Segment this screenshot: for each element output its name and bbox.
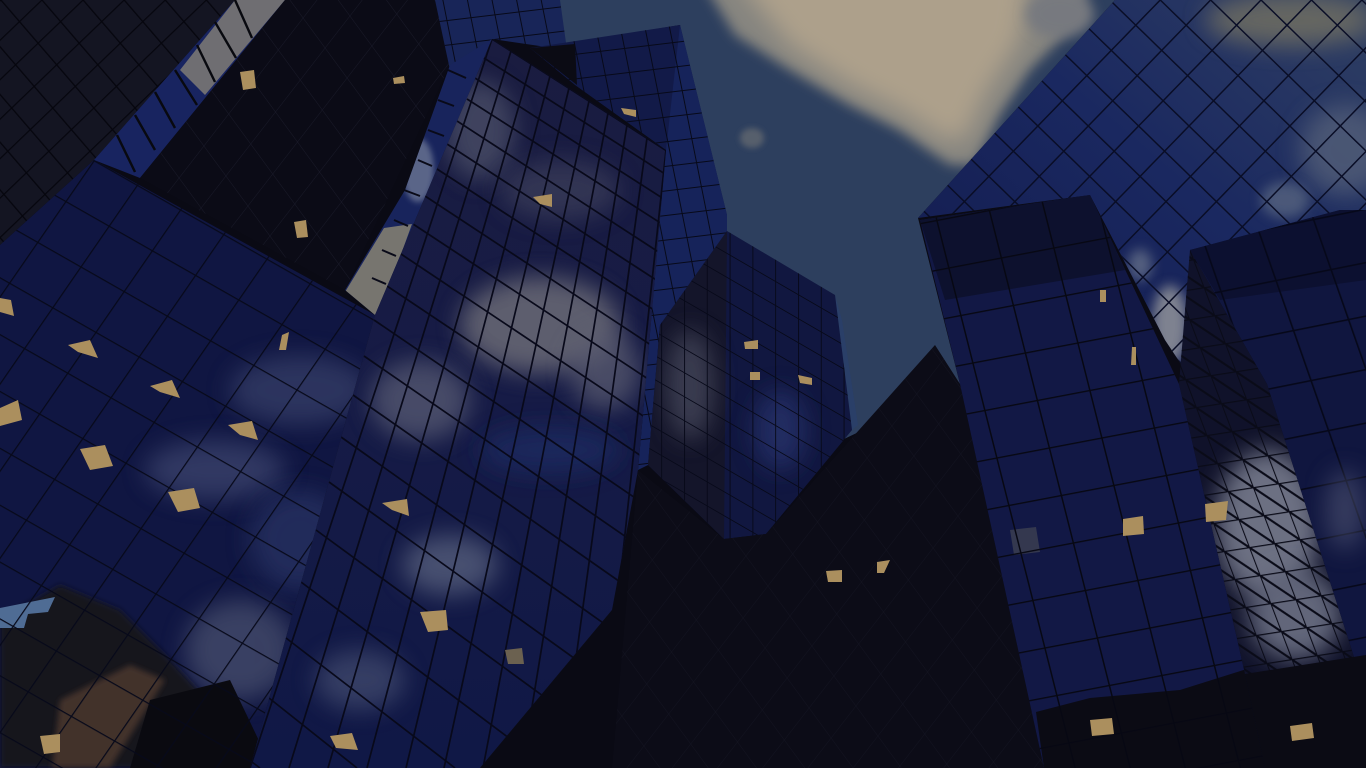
tower: right lattice facade with cloud reflection xyxy=(1179,250,1354,674)
tower: far-right dark blue panels xyxy=(1190,210,1366,700)
tower: top-left dark facade xyxy=(0,0,235,245)
sliver: sky and cloud reflected beside the centre face xyxy=(345,39,492,318)
tower: top-right glass facade xyxy=(918,0,1366,364)
tower: dark reflection face xyxy=(140,0,450,290)
facade: left wall with sky reflection xyxy=(0,160,375,768)
sky with cloud xyxy=(555,0,1115,439)
reflection: dark building at lower right xyxy=(1245,655,1366,768)
tower: centre-rear facade xyxy=(648,231,858,539)
tower: reflective strip with sky panels xyxy=(94,0,285,178)
tower: foreground dark central block xyxy=(612,345,1044,768)
facade: centre face with clouds xyxy=(250,39,666,768)
tower: right front blue facade xyxy=(920,195,1244,768)
tower: upper blue facades behind xyxy=(435,0,727,470)
